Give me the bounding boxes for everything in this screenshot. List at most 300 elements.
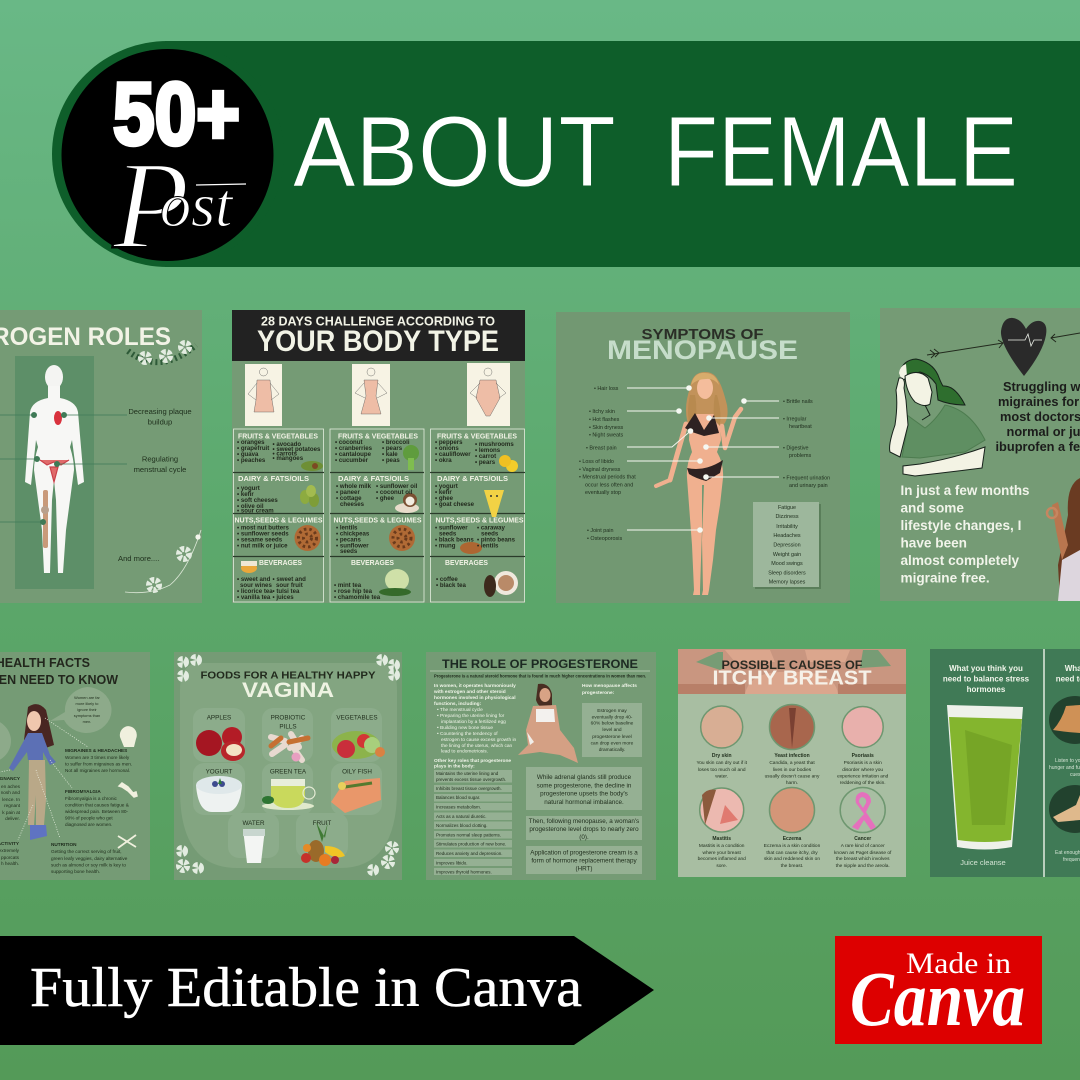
health facts text: diagnosed are women.	[65, 822, 112, 827]
right column text: Eat enough	[1055, 850, 1080, 856]
column headers	[234, 432, 524, 567]
food lists: sour fruit	[276, 582, 303, 589]
symptom labels: • Digestive	[783, 446, 809, 452]
condition labels: the breast which involves	[836, 856, 890, 862]
panel: itchy breast	[678, 649, 906, 877]
right text	[582, 683, 637, 696]
food lists: • peas	[382, 457, 400, 464]
food lists: • black beans	[435, 536, 474, 544]
heading: what you think	[943, 664, 1030, 694]
food lists: • sesame seeds	[237, 536, 283, 544]
panel: role of progesterone: Application of progesterone cream is a	[530, 850, 638, 856]
food lists: • cauliflower	[435, 451, 471, 458]
condition labels	[696, 753, 892, 869]
heading: vagina: VAGINA	[242, 679, 334, 702]
food lists: • lemons	[475, 447, 501, 454]
roles list: Acts as a natural diuretic.	[436, 814, 487, 819]
panel: role of progesterone: (0).	[579, 834, 589, 841]
health facts text: MIGRAINES & HEADACHES	[65, 748, 127, 753]
left text: the lining of the uterus, which can	[441, 743, 513, 749]
food lists: • cottage	[336, 495, 362, 502]
condition labels: Candida, a yeast that	[769, 760, 815, 766]
health facts text: en aches	[1, 784, 21, 789]
badge: 50+ post: ost	[160, 172, 234, 240]
food lists: seeds	[439, 530, 457, 538]
health facts text: Getting the correct serving of fruit,	[51, 849, 122, 854]
column headers: FRUITS & VEGETABLES	[338, 432, 418, 440]
condition labels: lives in our bodies	[773, 767, 812, 773]
header band: 28 DAYS CHALLENGE ACCORDING TO	[261, 314, 495, 328]
food lists: • chickpeas	[336, 530, 370, 538]
symptom labels: • Night sweats	[589, 432, 624, 438]
food lists	[237, 439, 516, 601]
left text: lead to endometriosis.	[441, 748, 488, 754]
health facts text: supporting bone health.	[51, 869, 100, 874]
heading: what you need	[1056, 664, 1080, 684]
panel: role of progesterone: progesterone level	[592, 734, 632, 740]
symptoms box: Fatigue	[778, 505, 796, 511]
food lists: • soft cheeses	[237, 497, 278, 504]
heading: THE ROLE OF PROGESTERONE	[442, 659, 638, 671]
flowers	[179, 657, 397, 873]
left text: estrogen to cause excess growth in	[441, 737, 517, 743]
health facts text: 90% of people who get	[65, 816, 113, 820]
food lists: • kefir	[435, 489, 452, 496]
column headers: BEVERAGES	[445, 558, 488, 567]
health facts text: Women are 3 times more likely	[65, 755, 130, 760]
symptom labels: • Hair loss	[594, 386, 619, 392]
food lists: • yogurt	[237, 485, 260, 492]
condition labels: skin and reddened skin on	[764, 856, 820, 862]
food cards	[193, 708, 382, 858]
food lists: • pears	[475, 459, 496, 466]
condition labels: Eczema	[783, 836, 802, 842]
roles list: Promotes normal sleep patterns.	[436, 832, 501, 838]
title: about female: FEMALE	[664, 96, 1018, 208]
speech bubbles	[0, 687, 112, 763]
panel: stress hormones	[930, 649, 1080, 877]
condition labels: where your breast	[702, 850, 742, 856]
right text: progesterone:	[582, 690, 615, 696]
footer ribbon: Fully Editable in Canva	[30, 957, 582, 1019]
condition labels: known as Paget disease of	[834, 850, 892, 856]
symptom leader lines	[627, 385, 779, 533]
food lists: • okra	[435, 457, 452, 464]
health facts text: Not all migraines are hormonal.	[65, 768, 130, 773]
condition labels: the nipple and the areola.	[836, 863, 890, 869]
roles list	[434, 770, 512, 875]
panel: estrogen roles	[0, 310, 202, 603]
badge: made in canva: Canva	[850, 955, 1025, 1042]
panel: role of progesterone: can drop even more	[591, 740, 634, 746]
badge: 50+ post: 50+	[113, 64, 240, 163]
food lists: • kale	[382, 451, 398, 458]
condition labels: A rare kind of cancer	[841, 843, 885, 849]
food lists: • mung	[435, 542, 456, 550]
header band: YOUR BODY TYPE	[257, 325, 499, 358]
food lists: • yogurt	[435, 483, 458, 490]
symptoms box: Weight gain	[773, 552, 801, 558]
role labels: buildup	[148, 418, 172, 426]
condition labels: that can cause itchy, dry	[766, 850, 818, 856]
condition labels: You skin can dry out if it	[696, 760, 748, 766]
food blobs	[1049, 696, 1080, 833]
symptom labels: • Loss of libido	[579, 459, 614, 465]
condition labels: Mastitis	[712, 836, 731, 842]
condition labels: Cancer	[854, 836, 871, 842]
symptoms box: Mood swings	[771, 561, 803, 567]
food lists: • sweet potatoes	[272, 446, 321, 453]
header band	[232, 310, 525, 361]
food lists: • mint tea	[334, 582, 362, 589]
panel: role of progesterone: natural hormonal imbalance.	[544, 799, 624, 806]
left text: • Building new bone tissue	[437, 725, 493, 731]
food lists: • paneer	[336, 489, 360, 496]
health facts text: deliver.	[5, 816, 20, 821]
food lists: • oranges	[237, 439, 265, 446]
symptom labels: • Hot flashes	[589, 417, 620, 423]
food lists: • lentils	[477, 542, 499, 550]
symptoms box: Headaches	[773, 533, 801, 539]
left text: Other key roles that progesterone	[434, 758, 511, 764]
panel: role of progesterone: progesterone level drops to nearly zero	[529, 826, 639, 833]
food lists: • pecans	[336, 536, 361, 544]
panel: migraine story	[880, 308, 1080, 601]
figure: body silhouette	[25, 365, 84, 573]
role labels: menstrual cycle	[134, 465, 186, 474]
food lists: • coffee	[436, 576, 458, 583]
column headers: DAIRY & FATS/OILS	[437, 474, 508, 483]
symptoms box: Dizziness	[775, 514, 799, 520]
food lists: • lentils	[336, 524, 358, 532]
panel: health facts: ignore their	[77, 707, 97, 712]
food lists: • cucumber	[335, 457, 369, 464]
column headers: BEVERAGES	[259, 558, 302, 567]
column headers: FRUITS & VEGETABLES	[238, 432, 318, 440]
food lists: • ghee	[376, 495, 395, 502]
right text: How menopause affects	[582, 683, 637, 689]
food lists: • sweet and	[237, 576, 271, 583]
body shape cards	[245, 363, 510, 426]
health facts text: pporcats	[1, 855, 20, 860]
left text: • Preparing the uterine lining for	[437, 713, 505, 719]
roles list: Maintains the uterine lining and	[436, 771, 499, 776]
symptom labels	[579, 386, 830, 542]
health facts text: condition that causes fatigue &	[65, 802, 130, 808]
health facts text: lence. In	[2, 797, 20, 802]
caption: Juice cleanse	[960, 858, 1006, 867]
roles list: Normalizes blood clotting.	[436, 823, 488, 828]
food lists: • vanilla tea	[237, 594, 271, 601]
icon: heart with pulse	[1001, 318, 1046, 376]
symptom labels: heartbeat	[789, 424, 812, 430]
left text: In women, it operates harmoniously	[434, 683, 516, 689]
food lists: • carrots	[272, 450, 298, 458]
roles list: Stimulates production of new bone.	[436, 842, 506, 846]
heading: itchy breast: ITCHY BREAST	[712, 668, 872, 690]
symptom labels: • Frequent urination	[783, 476, 830, 482]
food labels: GREEN TEA	[270, 768, 307, 776]
column headers: BEVERAGES	[351, 558, 394, 567]
condition labels: reddening of the skin.	[840, 780, 886, 786]
panel: role of progesterone: (HRT)	[575, 866, 593, 872]
symptom labels: eventually stop	[585, 490, 621, 496]
condition labels: Psoriasis	[852, 753, 874, 759]
food lists: • juices	[272, 594, 294, 601]
symptoms box: Irritability	[776, 524, 798, 530]
text: migraine free: have been	[900, 536, 967, 550]
food lists: • nut milk or juice	[237, 542, 288, 550]
food labels	[206, 714, 378, 827]
condition labels: experience irritation and	[837, 774, 889, 780]
health facts text: to suffer from migraines as men.	[65, 762, 132, 766]
condition labels: Psoriasis is a skin	[844, 760, 882, 766]
food lists: • sunflower	[336, 542, 369, 550]
condition labels: the breast.	[781, 863, 803, 869]
health facts text: such as almond or soy milk is key to	[51, 862, 126, 868]
panel: health facts: more likely to	[76, 701, 98, 706]
condition labels: water.	[715, 774, 728, 780]
heading: possible causes of: POSSIBLE CAUSES OF	[722, 660, 862, 672]
health facts text: NUTRITION	[51, 842, 77, 847]
role labels: Decreasing plaque	[128, 407, 192, 416]
food labels: WATER	[242, 820, 265, 827]
symptom labels: • Vaginal dryness	[579, 467, 621, 473]
footer ribbon	[0, 936, 654, 1045]
food labels: YOGURT	[206, 768, 233, 776]
food lists: • most nut butters	[237, 524, 290, 532]
symptoms box: Sleep disorders	[768, 570, 806, 576]
text: migraine free: and some	[900, 500, 964, 516]
food lists: • onions	[435, 445, 459, 452]
symptom labels: • Brittle nails	[783, 399, 813, 405]
food lists: • sunflower seeds	[237, 530, 289, 538]
panel: symptoms of menopause	[556, 312, 850, 603]
roles list: prevents excess tissue overgrowth.	[436, 777, 506, 782]
food lists: • sunflower	[435, 524, 468, 532]
food labels: OILY FISH	[342, 768, 372, 776]
food labels: APPLES	[207, 714, 231, 722]
badge: 50+ post	[62, 49, 274, 275]
food labels: PILLS	[279, 724, 297, 730]
panel: health facts: symptoms than	[74, 713, 100, 718]
symptoms box	[753, 502, 821, 589]
heading: what you think: need to balance stress	[943, 674, 1030, 684]
panel: role of progesterone: progesterone upsets the body's	[540, 790, 628, 798]
panel: role of progesterone	[426, 652, 656, 880]
arrows	[927, 333, 1080, 358]
roles list: Inhibits breast tissue overgrowth.	[436, 786, 502, 791]
column headers: DAIRY & FATS/OILS	[238, 474, 309, 483]
health facts text: regnant	[4, 803, 21, 808]
callout boxes	[526, 703, 642, 874]
header banner	[52, 41, 1080, 267]
column headers: DAIRY & FATS/OILS	[338, 474, 409, 483]
symptom labels: problems	[789, 453, 811, 459]
food lists: • chamomile tea	[334, 594, 381, 601]
flowers	[125, 343, 201, 593]
roles list: Reduces anxiety and depression.	[436, 851, 503, 856]
panel: role of progesterone: dramatically.	[599, 747, 625, 753]
food lists: cheeses	[340, 501, 365, 508]
food lists: • kefir	[237, 491, 254, 498]
text: struggling with migraines	[996, 379, 1080, 454]
condition labels: Yeast infection	[774, 753, 810, 759]
symptom labels: • Joint pain	[587, 528, 613, 534]
symptom labels: • Breast pain	[586, 446, 617, 452]
food lists: • tulsi tea	[272, 588, 300, 595]
health facts text: k pain at	[2, 810, 21, 815]
panel: body type challenge	[232, 310, 525, 603]
food columns	[234, 429, 524, 602]
food lists: • black tea	[436, 582, 467, 589]
condition labels: becomes inflamed and	[698, 856, 746, 862]
food labels: PROBIOTIC	[271, 714, 306, 722]
food lists: • whole milk	[336, 483, 372, 490]
panel: health facts: Women are far	[74, 695, 101, 700]
symptom labels: • Skin dryness	[589, 425, 624, 431]
food lists: • coconut oil	[376, 489, 413, 496]
food lists: • mangoes	[272, 455, 304, 462]
food pictures	[196, 727, 385, 866]
icons	[118, 726, 137, 848]
symptoms box: Depression	[773, 542, 801, 548]
health facts text: nosh and	[1, 790, 20, 795]
panel: health facts: men.	[83, 719, 91, 724]
badge: made in canva: Made in	[906, 947, 1011, 980]
heading: menopause: MENOPAUSE	[607, 335, 798, 365]
photo: seated woman	[518, 684, 578, 763]
left text: plays in the body:	[434, 764, 475, 770]
food lists: • cantaloupe	[335, 451, 372, 458]
food lists: • mushrooms	[475, 441, 514, 448]
food lists: • sour cream	[237, 508, 274, 514]
badge: 50+ post: P	[112, 137, 189, 275]
heading: what you think: hormones	[967, 685, 1006, 694]
left text	[433, 683, 517, 770]
panel: role of progesterone: level and	[602, 727, 622, 733]
left text: • The menstrual cycle	[437, 707, 483, 713]
symptom labels: • Itchy skin	[589, 409, 615, 415]
column headers: FRUITS & VEGETABLES	[437, 432, 517, 440]
intro line: Progesterone is a natural steroid hormone that is found in much higher concentrations in women than men.	[434, 674, 646, 678]
panel: role of progesterone: form of hormone replacement therapy	[531, 858, 638, 864]
symptoms box: Memory lapses	[769, 580, 806, 586]
roles list: Balances blood sugar.	[436, 795, 480, 800]
food lists: seeds	[340, 548, 358, 555]
dotted leader lines	[0, 718, 88, 840]
food lists: • guava	[237, 451, 259, 458]
text: migraine free: lifestyle changes, I	[900, 518, 1021, 533]
food lists: • coconut	[335, 439, 363, 446]
condition labels: Dry skin	[712, 753, 732, 759]
text: migraine free	[900, 483, 1030, 586]
left text: implantation by a fertilized egg	[441, 719, 506, 725]
food lists: • licorice tea	[237, 588, 273, 595]
heading: what you think: What you think you	[949, 664, 1023, 673]
panel: role of progesterone: While adrenal glands still produce	[537, 774, 632, 781]
symptom labels: • Irregular	[783, 416, 807, 422]
symptom labels: occur less often and	[585, 482, 633, 488]
column headers: NUTS,SEEDS & LEGUMES	[334, 516, 422, 524]
icon: pink ribbon	[852, 792, 876, 830]
text: migraine free: In just a few months	[900, 483, 1030, 498]
column headers: NUTS,SEEDS & LEGUMES	[436, 516, 524, 524]
condition circles	[700, 704, 885, 832]
food lists: • peppers	[435, 439, 463, 446]
condition labels: Mastitis is a condition	[699, 843, 745, 849]
food lists: • goat cheese	[435, 501, 475, 508]
heading: symptoms of: SYMPTOMS OF	[642, 327, 764, 343]
title: about female: ABOUT	[293, 96, 614, 208]
roles list: Improves libido.	[436, 860, 468, 866]
food lists: seeds	[481, 530, 499, 538]
food lists: • carrot	[475, 453, 496, 460]
text: migraine free: almost completely	[900, 553, 1020, 568]
panel: role of progesterone: Then, following menopause, a woman's	[529, 818, 639, 825]
condition labels: usually doesn't cause any	[765, 774, 820, 780]
health facts text: h health.	[1, 861, 19, 866]
health facts text: widespread pain. Between 80-	[65, 809, 129, 814]
panel: role of progesterone: eventually drop 40-	[592, 714, 633, 720]
roles list: Increases metabolism.	[436, 804, 481, 810]
food lists: • cranberries	[335, 445, 373, 452]
food lists: • peaches	[237, 457, 266, 464]
photo: smiling woman	[1047, 478, 1080, 601]
food lists: • olive oil	[237, 503, 264, 510]
food lists: • caraway	[477, 524, 505, 532]
food lists: • pinto beans	[477, 536, 516, 544]
food icons	[241, 445, 518, 597]
symptom labels: • Menstrual periods that	[579, 474, 636, 480]
role labels	[118, 407, 192, 563]
food lists: sour wines	[240, 582, 272, 589]
column headers: NUTS,SEEDS & LEGUMES	[234, 516, 323, 524]
condition labels: harm.	[786, 780, 798, 786]
heading: foods for a healthy happy: FOODS FOR A HEALTHY HAPPY	[200, 670, 376, 682]
food labels: VEGETABLES	[336, 714, 378, 722]
roles list: Improves thyroid hormones.	[436, 870, 492, 874]
panel: role of progesterone: Estrogen may	[597, 708, 627, 714]
right column text	[1049, 758, 1080, 863]
panel: foods	[174, 652, 402, 880]
health facts text	[0, 748, 132, 874]
left text: • Countering the tendency of	[437, 731, 498, 737]
figure: woman	[656, 372, 741, 595]
health facts text: FIBROMYALGIA	[65, 789, 101, 794]
heading	[0, 656, 118, 687]
left text: with estrogen and other steroid	[433, 689, 506, 695]
text: migraine free: migraine free.	[900, 570, 990, 586]
role labels: Regulating	[142, 454, 178, 464]
symptom labels: and urinary pain	[789, 483, 828, 489]
food lists: • avocado	[272, 441, 301, 448]
health facts text: Fibromyalgia is a chronic	[65, 796, 117, 801]
illustration: woman with headache	[890, 359, 985, 476]
condition labels: Eczema is a skin condition	[764, 843, 821, 849]
header photo	[678, 649, 906, 694]
symptom labels: • Osteoporosis	[587, 536, 622, 542]
leader lines	[0, 412, 127, 525]
left text: hormones involved in physiological	[434, 695, 516, 701]
food lists: • sunflower oil	[376, 483, 418, 490]
left text: functions, including:	[434, 701, 482, 707]
food lists: • sweet and	[272, 576, 306, 583]
food lists: • pears	[382, 445, 403, 452]
condition labels: loses too much oil and	[698, 767, 746, 773]
panel: health facts	[0, 652, 150, 880]
photo: green juice	[947, 705, 1023, 850]
